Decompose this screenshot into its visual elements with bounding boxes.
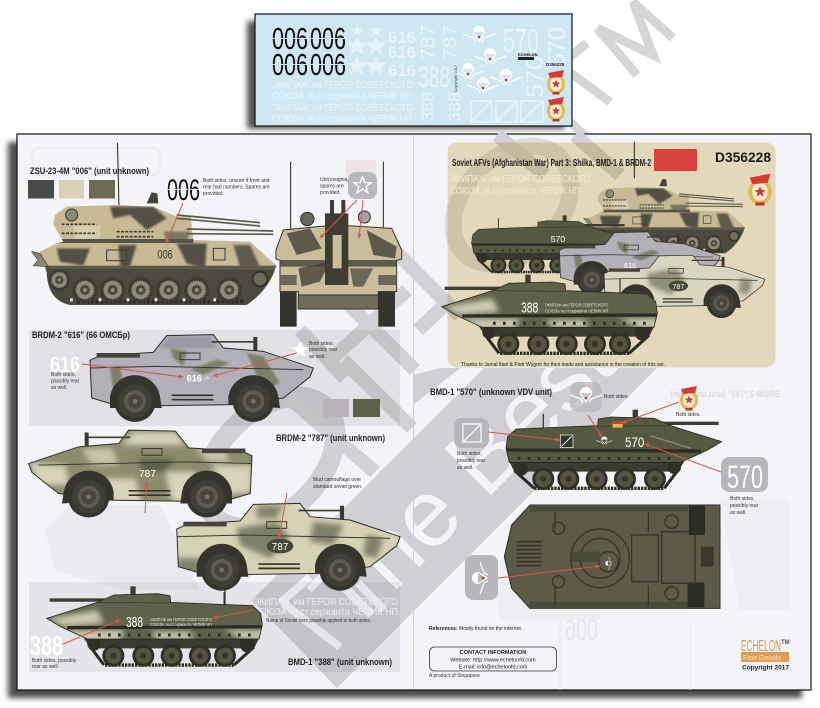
contact box: E-mail: info@echelonfd.com <box>459 664 528 670</box>
number: 787 on left vehicle: 787 <box>139 469 156 480</box>
note: 388 <box>32 658 77 670</box>
antenna on 388 <box>223 592 225 606</box>
white numbers 616 787 388 570: 388 <box>418 92 437 122</box>
note: 006: Both sides, unsure if front and <box>203 178 270 184</box>
note: both sides: Both sides. <box>604 394 629 400</box>
vehicle: ZSU-23-4M side view: 006 <box>157 247 173 261</box>
black 006 numbers <box>272 21 346 82</box>
main sheet shadow <box>8 142 802 698</box>
heading: BRDM-2 616: BRDM-2 "616" (66 ОМСБр) <box>32 330 130 340</box>
decal: 570 sample: 570 <box>727 459 763 495</box>
hero BRDM 787: 787 <box>672 282 684 291</box>
contact box <box>430 647 556 671</box>
heading: BRDM-2 787: BRDM-2 "787" (unit unknown) <box>276 433 385 443</box>
decal echelon logo: D356228 <box>546 62 565 67</box>
hero ZSU <box>583 179 747 253</box>
callout: 006 number: 006 <box>167 174 200 207</box>
ghost decal text on 388 band: ЭКИПАЖ им ГЕРОЯ СОВЕТСКОГО <box>253 597 398 608</box>
note: 006: provided. <box>203 191 224 197</box>
white numbers 616 787 388 570: 570 <box>544 27 571 67</box>
show-through ghost printing: 006 <box>565 614 598 647</box>
heading: BMD-1 388: BMD-1 "388" (unit unknown) <box>288 657 392 667</box>
hero faint decal text: СОЮЗА гв.ст.сержанта ЧЕПИК НП <box>450 186 580 197</box>
thanks note: Thanks to Jamal Itani & Piotr Wygrór for their leads and assistance in the creation of this set. <box>461 362 665 368</box>
hero faint decal text: ЭКИПАЖ им ГЕРОЯ СОВЕТСКОГО <box>450 174 590 185</box>
note: 616 <box>51 372 80 391</box>
hero BRDM 787 <box>604 255 765 318</box>
white numbers 616 787 388 570: 787 <box>418 25 438 60</box>
decal: paratrooper sample top <box>570 382 602 412</box>
paratrooper emblems <box>452 26 522 93</box>
note: name of hero: Name of Soviet hero possibly applied to both sides. <box>266 618 371 624</box>
vehicle: BRDM-2 787 right: 787 <box>272 542 289 553</box>
logo: Echelon: Fine Details <box>743 655 782 662</box>
colour swatches BRDM <box>323 399 380 417</box>
note: star <box>309 341 338 360</box>
white text strips: ЭКИПАЖ им ГЕРОЯ СОВЕТСКОГО <box>272 103 413 114</box>
hero 388 markings <box>521 300 609 316</box>
note: square: as well. <box>457 465 474 471</box>
references: References: Mostly found on the internet. <box>429 626 522 632</box>
show-through ghost printing: BRDM-2 "787" (unit unknown) <box>670 389 780 399</box>
note: 388: rear as well. <box>32 664 59 670</box>
white text strips: ЭКИПАЖ им ГЕРОЯ СОВЕТСКОГО <box>272 80 413 91</box>
vehicle: BRDM-2 787 right <box>177 503 400 591</box>
show-through ghost printing <box>32 148 790 690</box>
note: star: possibly rear <box>309 347 338 353</box>
contact box: Website: http://www.echelonfd.com <box>450 658 536 664</box>
logo: Echelon: Copyright 2017 <box>742 664 789 672</box>
watermark: The Best: The Best <box>291 306 635 650</box>
watermark: white stripes in band <box>280 360 477 647</box>
hero vehicles <box>442 142 765 355</box>
white numbers 616 787 388 570 <box>388 22 571 122</box>
note: mud camouflage: standard soviet green. <box>313 484 362 490</box>
note: square: possibly rear <box>457 458 486 464</box>
note: 388: Both sides, possibly <box>32 658 77 664</box>
show-through ghost printing: BRDM-2 "616" (66 ОМСБр) <box>432 479 540 489</box>
black 006 numbers: 006 <box>310 47 346 82</box>
hero 388 markings: 388 <box>521 300 538 316</box>
white numbers 616 787 388 570: 616 <box>388 43 416 62</box>
white numbers 616 787 388 570: 616 <box>388 61 416 80</box>
vehicle: BRDM-2 616 <box>90 335 313 422</box>
note: 006 <box>203 178 270 197</box>
hero title: Soviet AFVs (Afghanistan War) Part 3: Shilka, BMD-1 & BRDM-2 <box>452 158 651 169</box>
centre fold <box>413 135 414 689</box>
note: unit insignia: provided. <box>320 190 341 196</box>
hero 388 markings: СОЮЗА гв.ст.сержанта ЧЕПИК НП <box>545 308 608 313</box>
number and name on 388: ЭКИПАЖ им ГЕРОЯ СОВЕТСКОГО <box>150 617 212 622</box>
white numbers 616 787 388 570: 388 <box>445 92 464 122</box>
decal echelon logo: Copyright 2017 <box>453 64 458 92</box>
logo: Echelon: ECHELON <box>741 638 781 655</box>
note: mud camouflage: Mud camouflage over <box>313 477 361 483</box>
red leader arrows <box>63 200 721 644</box>
guards badge <box>748 174 772 206</box>
vehicle: ZSU-23-4M front view <box>276 162 402 327</box>
heading: BMD-1 570: BMD-1 "570" (unknown VDV unit) <box>430 387 552 397</box>
white text strips <box>272 80 413 125</box>
watermark: TM letters above the sheet <box>530 2 673 145</box>
panel: hero title card <box>442 142 776 368</box>
black 006 numbers: 006 <box>310 21 346 56</box>
panel: decal sheet <box>255 14 572 126</box>
logo: Echelon <box>741 638 790 672</box>
white stars <box>347 24 386 75</box>
note: unit insignia: Unit insignia, <box>320 177 349 183</box>
decal: 388 sample: 388 <box>30 630 63 661</box>
note: square: Both sides, <box>457 451 482 457</box>
note: 570: Both sides, <box>730 496 755 502</box>
number and name on 388: СОЮЗА гв.ст.сержанта ЧЕПИК НП <box>150 622 212 627</box>
decal: star sample <box>291 341 309 357</box>
colour swatches ZSU <box>28 180 115 198</box>
watermark: gray band <box>252 368 657 688</box>
badge: star insignia <box>348 172 377 199</box>
antenna ZSU side <box>118 143 119 208</box>
note: unit insignia <box>320 177 349 196</box>
note: 616: possibly rear <box>51 378 80 384</box>
band: BMD-1 388 background <box>29 582 400 672</box>
decal: square sample <box>454 418 489 448</box>
logo: Echelon: TM <box>781 640 790 646</box>
white numbers 616 787 388 570: 570 <box>503 22 539 59</box>
decal sheet shadow <box>247 21 565 129</box>
note: 616: Both sides, <box>51 372 76 378</box>
vehicle: BMD-1 570 side: 570 <box>625 434 644 450</box>
note: 570 <box>730 496 759 516</box>
note: square <box>457 451 486 471</box>
number and name on 388: 388 <box>126 614 143 631</box>
decal echelon logo: ECHELON <box>518 52 538 57</box>
decal echelon logo <box>453 52 565 92</box>
heading: ZSU-23-4M: ZSU-23-4M "006" (unit unknown) <box>30 166 149 176</box>
note: 006: rear had numbers. Spares are <box>203 184 270 190</box>
watermark: letter stripes <box>150 135 620 510</box>
black 006 numbers: 006 <box>272 21 308 56</box>
white text strips: СОЮЗА гв.ст.сержанта ЧЕПИК НП <box>272 91 412 102</box>
vehicle: BMD-1 570 side <box>506 410 722 490</box>
note: both sides badge: Both sides. <box>676 412 701 418</box>
ghost decal text on 388 band <box>253 597 398 618</box>
note: 616: as well. <box>51 385 68 391</box>
white square insignia <box>471 101 543 122</box>
watermark: corner patch <box>413 368 470 412</box>
band: BRDM-2 616 background <box>29 330 400 426</box>
watermark: ring letters <box>179 123 594 553</box>
contact box: CONTACT INFORMATION <box>460 650 526 656</box>
decal: paratrooper sample lower <box>465 555 498 600</box>
vehicle: BRDM-2 787 left <box>29 430 252 517</box>
vehicle: ZSU-23-4M side view <box>32 192 280 305</box>
note: mud camouflage <box>313 477 362 490</box>
flag <box>654 149 697 171</box>
product code: D356228 <box>715 149 771 165</box>
guards badge sample <box>680 386 698 410</box>
hero 388 markings: ЭКИПАЖ им ГЕРОЯ СОВЕТСКОГО <box>545 303 609 308</box>
white text strips: СОЮЗА гв.ст.сержанта ЧЕПИК НП <box>272 114 412 125</box>
hero faint decal text <box>450 174 590 197</box>
vehicle: BRDM-2 616: 616 <box>187 373 202 383</box>
hero BMD 570 <box>472 215 627 273</box>
note: unit insignia: spares are <box>320 184 344 190</box>
white numbers 616 787 388 570: 787 <box>440 25 460 60</box>
ghost decal text on 388 band: СОЮЗА гв.ст.сержанта ЧЕПИК НП <box>253 607 398 618</box>
vehicle: BMD-1 388 <box>47 586 264 667</box>
note: star: as well. <box>309 354 326 360</box>
black 006 numbers: 006 <box>272 47 308 82</box>
decal: 570 sample <box>721 457 768 495</box>
hero BRDM 616: 616 <box>624 261 636 270</box>
note: 570: as well. <box>730 510 747 516</box>
callout: 006 number <box>166 174 201 207</box>
panel: main sheet <box>17 134 811 690</box>
note: star: Both sides, <box>309 341 334 347</box>
hero BMD 388 <box>442 275 659 355</box>
product origin: A product of Singapore <box>429 673 480 679</box>
white numbers 616 787 388 570: 570 <box>522 56 549 98</box>
hero BRDM 616 <box>559 232 720 295</box>
guards badges <box>547 70 565 122</box>
number and name on 388 <box>126 614 212 631</box>
white numbers 616 787 388 570: 388 <box>418 61 450 94</box>
decal: 616 sample: 616 <box>50 352 80 377</box>
vehicle: BMD-1 top view <box>504 505 720 608</box>
note: 570: possibly rear <box>730 503 759 509</box>
hero BMD 570: 570 <box>551 235 566 244</box>
white numbers 616 787 388 570: 616 <box>388 28 416 47</box>
